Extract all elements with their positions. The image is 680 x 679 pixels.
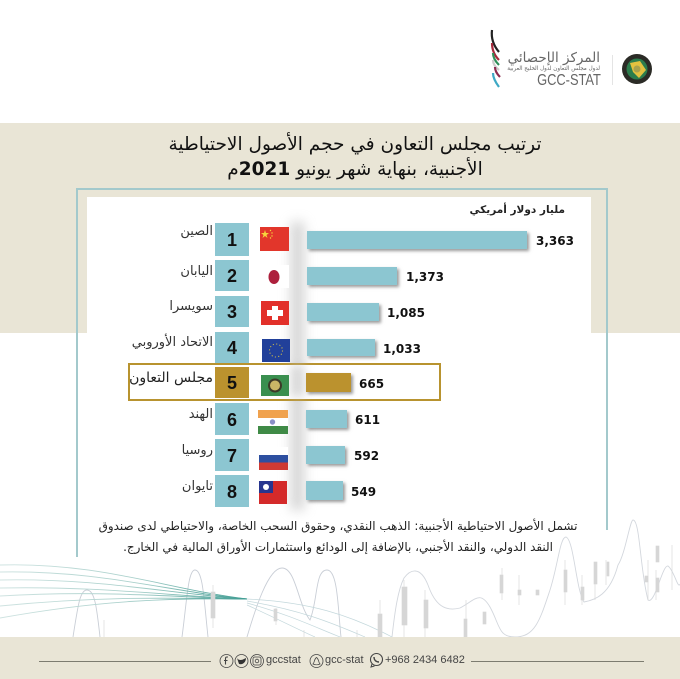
footnote xyxy=(99,518,578,554)
row 5 label: GCC: مجلس التعاون xyxy=(129,370,213,386)
highlight flag column shadow xyxy=(291,365,304,397)
rank 8 xyxy=(215,475,249,507)
value 3: 1,085 xyxy=(387,306,425,320)
rank 4: 4 xyxy=(227,338,237,358)
icon: logo swoosh xyxy=(490,30,501,88)
row 7 label: Russia: روسيا xyxy=(182,443,213,458)
footnote: تشمل الأصول الاحتياطية الأجنبية: الذهب النقدي، وحقوق السحب الخاصة، والاحتياطي لدى صندوق xyxy=(99,519,577,533)
flag: India xyxy=(258,410,288,434)
title: ترتيب مجلس التعاون في حجم الأصول الاحتياطية xyxy=(168,134,542,155)
bar 1 xyxy=(307,231,527,249)
title: الأجنبية، بنهاية شهر يونيو 2021م xyxy=(227,159,483,180)
rank 1: 1 xyxy=(227,230,237,250)
logo arabic name: المركز الإحصائي xyxy=(508,50,600,66)
rank 7 xyxy=(215,439,249,471)
icon: GCC emblem xyxy=(622,54,652,84)
value 1: 3,363 xyxy=(536,234,574,248)
flag: Switzerland xyxy=(261,301,289,325)
flag: EU xyxy=(262,339,290,362)
rank 2 xyxy=(215,260,249,291)
logo xyxy=(490,30,652,89)
frame left extension xyxy=(76,528,78,557)
white chart panel xyxy=(87,197,591,527)
row 1 label: China: الصين xyxy=(180,224,213,239)
row 4 label: EU: الاتحاد الأوروبي xyxy=(132,335,213,350)
row 2 label: Japan: اليابان xyxy=(180,264,213,279)
highlight box: GCC row xyxy=(128,363,441,401)
unit label: مليار دولار أمريكي xyxy=(470,204,565,216)
row 3 label: Switzerland: سويسرا xyxy=(169,299,213,314)
flag: Taiwan xyxy=(259,481,287,504)
flag: Japan xyxy=(268,265,289,288)
footer handle: gccstat: gccstat xyxy=(266,654,301,666)
bar 2 xyxy=(307,267,397,285)
rank 6: 6 xyxy=(227,410,237,430)
flag column shadow xyxy=(291,222,304,510)
row 6 label: India: الهند xyxy=(189,407,213,422)
background line chart xyxy=(0,520,680,637)
rank 5: 5 xyxy=(227,373,237,393)
rank 1 xyxy=(215,223,249,256)
bar 7 xyxy=(306,446,345,464)
bar 6 xyxy=(306,410,347,428)
flag: Russia xyxy=(259,447,288,470)
footer left rule xyxy=(39,661,211,662)
flag: China xyxy=(260,227,289,251)
value 5: 665 xyxy=(359,377,384,391)
footer handle: gcc-stat: gcc-stat xyxy=(325,654,364,666)
footer right rule xyxy=(471,661,644,662)
value 7: 592 xyxy=(354,449,379,463)
value 6: 611 xyxy=(355,413,380,427)
footer band xyxy=(0,637,680,679)
bar 4 xyxy=(307,339,375,356)
bar 8 xyxy=(306,481,343,500)
rank 3 xyxy=(215,296,249,327)
bar 3 xyxy=(307,303,379,321)
rank 6 xyxy=(215,403,249,435)
rank 7: 7 xyxy=(227,446,237,466)
footer social icons xyxy=(220,653,383,668)
value 8: 549 xyxy=(351,485,376,499)
rank 8: 8 xyxy=(227,482,237,502)
footer phone: +968 2434 6482 xyxy=(385,654,465,666)
panel frame xyxy=(76,188,608,530)
value 4: 1,033 xyxy=(383,342,421,356)
footnote: النقد الدولي، والنقد الأجنبي، بالإضافة إلى الودائع واستثمارات الأوراق المالية في الخارج. xyxy=(123,540,553,554)
title xyxy=(168,132,542,180)
top beige panel xyxy=(0,123,680,333)
rank 4 xyxy=(215,332,249,363)
rank 5 xyxy=(215,367,249,398)
value 2: 1,373 xyxy=(406,270,444,284)
rank 2: 2 xyxy=(227,266,237,286)
logo GCC-STAT text: GCC-STAT xyxy=(537,72,601,89)
rank 3: 3 xyxy=(227,302,237,322)
row 8 label: Taiwan: تايوان xyxy=(182,479,213,494)
bar 5 xyxy=(306,373,351,392)
logo arabic subtitle: لدول مجلس التعاون لدول الخليج العربية xyxy=(507,66,600,72)
flag: GCC xyxy=(261,375,289,396)
divider xyxy=(612,55,613,85)
